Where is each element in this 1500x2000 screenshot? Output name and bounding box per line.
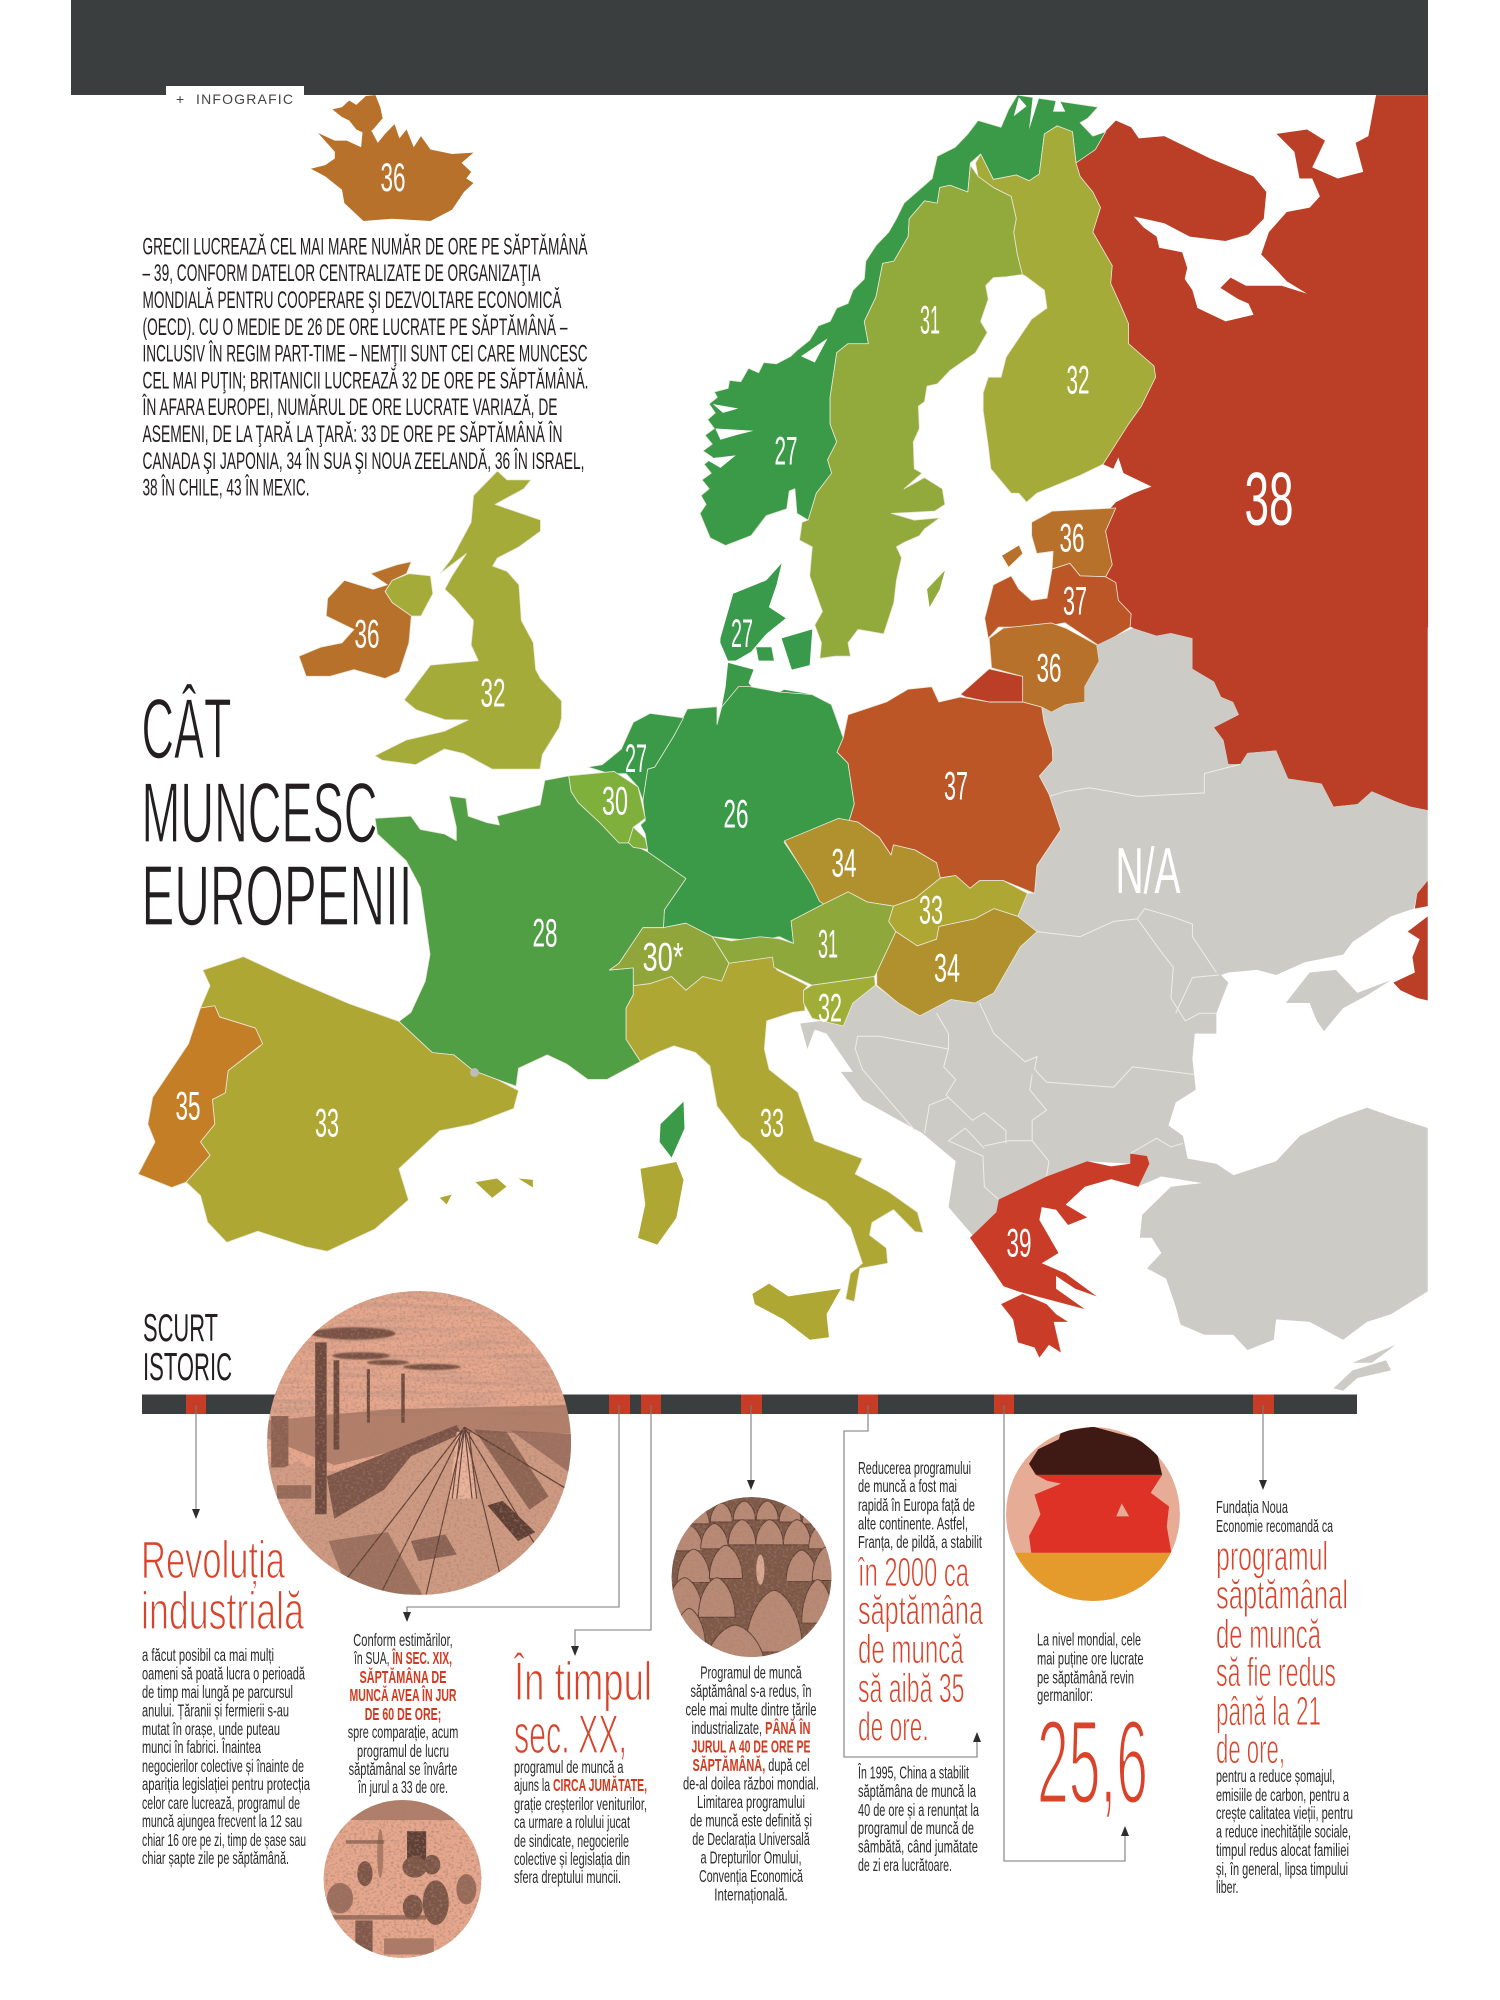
text: în timpul body: ajuns la CIRCA JUMĂTATE,	[514, 1774, 647, 1795]
callout: în 2000 35 de ore	[857, 1549, 983, 1750]
intro text: 38 ÎN CHILE, 43 ÎN MEXIC.	[142, 474, 310, 502]
text: fundația body: a reduce inechitățile sociale,	[1216, 1822, 1351, 1842]
text: programul de muncă redus	[683, 1662, 819, 1904]
country: Estonia	[1002, 508, 1116, 577]
label: Lithuania: 36	[1036, 646, 1062, 690]
timeline bar	[142, 1394, 1357, 1414]
text: revoluția body: de timp mai lungă pe parcursul	[142, 1682, 293, 1702]
text: programul de muncă redus: cele mai multe dintre țările	[686, 1700, 816, 1720]
country: Norway	[700, 95, 1106, 546]
text: în timpul body: programul de muncă a	[514, 1757, 624, 1777]
country: Denmark	[720, 563, 812, 670]
text: programul de muncă redus: JURUL A 40 DE ORE PE	[692, 1736, 810, 1756]
text: în timpul body	[514, 1757, 647, 1887]
intro text	[142, 234, 588, 502]
label: Hungary: 34	[934, 946, 960, 990]
country: Sweden: 31	[920, 298, 940, 342]
country: France	[375, 776, 686, 1158]
arrows and connectors	[192, 1405, 1267, 1861]
callout: în 2000 35 de ore: în 2000 ca	[857, 1549, 969, 1595]
callout: în 2000 35 de ore: să aibă 35	[858, 1665, 964, 1711]
text: conform estimărilor: în SUA, ÎN SEC. XIX,	[353, 1647, 452, 1668]
country: Switzerland	[609, 923, 729, 990]
country: Italy	[626, 957, 923, 1340]
country: Sweden	[799, 165, 1022, 658]
country: Spain	[186, 957, 533, 1251]
label: Ireland: 36	[354, 612, 380, 656]
label: Latvia: 37	[1063, 580, 1087, 624]
block: germany stat	[1037, 1630, 1148, 1829]
region: Kaliningrad	[960, 669, 1023, 702]
label: Czech Republic: 34	[832, 842, 856, 886]
text: programul de muncă redus: Internațională.	[714, 1884, 788, 1904]
text: fundația body: timpul redus alocat familiei	[1216, 1840, 1349, 1860]
text: revoluția body: oameni să poată lucra o perioadă	[142, 1664, 305, 1684]
intro text: MONDIALĂ PENTRU COOPERARE ŞI DEZVOLTARE ECONOMICĂ	[142, 287, 562, 314]
text: china 1995: sâmbătă, când jumătate	[858, 1836, 978, 1856]
callout: 21 de ore: săptămânal	[1216, 1572, 1348, 1618]
intro text: CEL MAI PUŢIN; BRITANICII LUCREAZĂ 32 DE ORE PE SĂPTĂMÂNĂ.	[142, 367, 588, 394]
text: în timpul body: sfera dreptului muncii.	[514, 1867, 621, 1887]
country: Czech Republic	[784, 818, 940, 906]
label: Slovakia: 33	[919, 888, 943, 932]
heading: revoluția industrială	[141, 1531, 304, 1641]
text: revoluția body: chiar șapte zile pe săptămână.	[142, 1848, 289, 1868]
photo: rows of workers	[672, 1497, 832, 1657]
text: conform estimărilor: săptămânal se învârte	[349, 1759, 457, 1779]
text: la nivel mondial: mai puține ore lucrate	[1037, 1649, 1144, 1669]
text: fundația intro: Fundația Noua	[1216, 1497, 1288, 1517]
intro text: (OECD). CU O MEDIE DE 26 DE ORE LUCRATE PE SĂPTĂMÂNĂ –	[142, 314, 568, 341]
country: Denmark: 27	[731, 612, 753, 656]
country: Iceland	[311, 95, 474, 221]
text: fundația body: pentru a reduce șomajul,	[1216, 1766, 1335, 1786]
text: revoluția body: celor care lucrează, programul de	[142, 1793, 300, 1813]
text: fundația body: emisiile de carbon, pentru a	[1216, 1785, 1349, 1805]
text: revoluția body: chiar 16 ore pe zi, timp de șase sau	[142, 1830, 306, 1850]
text: programul de muncă redus: a Drepturilor Omului,	[700, 1848, 802, 1868]
text: la nivel mondial: germanilor:	[1037, 1685, 1093, 1705]
country: Ireland	[299, 562, 411, 679]
text: china 1995: 40 de ore și a renunțat la	[858, 1800, 979, 1820]
text: fundația intro: Economie recomandă ca	[1216, 1516, 1333, 1536]
title: EUROPENII	[142, 849, 412, 944]
text: revoluția body: negocierilor colective și înainte de	[142, 1756, 304, 1776]
text: china 1995: săptămâna de muncă la	[858, 1781, 976, 1801]
heading: scurt istoric	[143, 1307, 232, 1389]
title: MUNCESC	[142, 766, 378, 861]
text: revoluția body: anului. Țăranii și fermierii s-au	[142, 1700, 289, 1720]
text: china 1995: În 1995, China a stabilit	[857, 1763, 969, 1783]
icon: germany flag map circle	[1006, 1427, 1181, 1601]
text: 25,6	[1037, 1696, 1148, 1829]
text: programul de muncă redus: de-al doilea război mondial.	[683, 1774, 819, 1794]
photo: workshop	[323, 1800, 482, 1959]
label: Belgium: 30	[602, 780, 628, 824]
intro text: – 39, CONFORM DATELOR CENTRALIZATE DE ORGANIZAŢIA	[142, 260, 541, 287]
country: Netherlands: 27	[625, 737, 647, 781]
text: revoluția body: muncă ajungea frecvent la 12 sau	[142, 1811, 302, 1831]
block: revoluția industrială	[141, 1531, 310, 1868]
country: United Kingdom	[375, 471, 562, 769]
text: reducerea intro: Reducerea programului	[858, 1458, 971, 1478]
country: Lithuania	[989, 623, 1099, 712]
intro text: CANADA ŞI JAPONIA, 34 ÎN SUA ŞI NOUA ZEELANDĂ, 36 ÎN ISRAEL,	[142, 448, 584, 475]
label: N/A: N/A	[1116, 834, 1181, 907]
text: reducerea intro: de muncă a fost mai	[858, 1476, 957, 1496]
text: revoluția body	[142, 1645, 310, 1868]
header bar	[71, 0, 1428, 95]
text: conform estimărilor: Conform estimărilor,	[353, 1630, 453, 1650]
text: fundația body: liber.	[1216, 1877, 1238, 1897]
text: conform estimărilor	[348, 1630, 458, 1797]
intro text: INCLUSIV ÎN REGIM PART-TIME – NEMŢII SUNT CEI CARE MUNCESC	[142, 341, 588, 368]
heading: în timpul sec. XX	[513, 1650, 652, 1765]
callout: 21 de ore: până la 21	[1216, 1688, 1321, 1734]
text: revoluția body: munci în fabrici. Înaintea	[142, 1737, 261, 1757]
text: în timpul body: de sindicate, negocierile	[514, 1831, 629, 1851]
label: Norway: 27	[774, 430, 798, 474]
text: conform estimărilor: în jurul a 33 de ore.	[357, 1777, 448, 1797]
country: Russia	[1076, 95, 1428, 1001]
text: revoluția body: mutat în orașe, unde puteau	[142, 1719, 280, 1739]
country: Portugal	[138, 1006, 263, 1187]
text: la nivel mondial: La nivel mondial, cele	[1037, 1630, 1141, 1650]
text: în timpul body: ca urmare a rolului jucat	[514, 1812, 630, 1832]
intro text: GRECII LUCREAZĂ CEL MAI MARE NUMĂR DE ORE PE SĂPTĂMÂNĂ	[142, 234, 588, 260]
text: revoluția body: a făcut posibil ca mai mulți	[142, 1645, 274, 1665]
photo: industrial factory engraving	[267, 1291, 572, 1595]
label: Germany: 26	[724, 792, 748, 836]
country: Germany	[640, 663, 854, 943]
text: în timpul body: colective și legislația din	[514, 1849, 630, 1869]
country: Austria	[712, 892, 896, 985]
text: programul de muncă redus: SĂPTĂMÂNĂ, după cel	[692, 1754, 810, 1775]
label: Italy: 33	[760, 1102, 784, 1146]
callout: 21 de ore: să fie redus	[1216, 1649, 1336, 1695]
callout: 21 de ore: de muncă	[1216, 1611, 1321, 1657]
text: conform estimărilor: programul de lucru	[357, 1741, 449, 1761]
tab: infografic	[166, 86, 304, 110]
text: conform estimărilor: DE 60 DE ORE;	[365, 1704, 441, 1724]
text: programul de muncă redus: de Declarația Universală	[692, 1829, 810, 1849]
label: Russia: 38	[1244, 457, 1294, 541]
text: china 1995: de zi era lucrătoare.	[858, 1855, 952, 1875]
text: programul de muncă redus: de muncă este definită și	[690, 1810, 812, 1830]
map of Europe	[138, 95, 1428, 1391]
text: în timpul body: grație creșterilor veniturilor,	[514, 1794, 647, 1814]
text: fundația intro	[1216, 1497, 1333, 1536]
label: Spain: 33	[315, 1102, 339, 1146]
callout: 21 de ore: programul	[1216, 1533, 1328, 1579]
country: Finland	[976, 126, 1156, 502]
country: Belgium	[569, 771, 648, 850]
label: Iceland: 36	[380, 156, 406, 200]
label: United Kingdom: 32	[480, 672, 506, 716]
text: programul de muncă redus: Limitarea programului	[697, 1792, 805, 1812]
text: conform estimărilor: spre comparație, acum	[348, 1722, 458, 1742]
text: china 1995	[857, 1763, 979, 1875]
country: Slovenia	[804, 977, 875, 1030]
label: France: 28	[532, 912, 558, 956]
text: conform estimărilor: SĂPTĂMÂNA DE	[360, 1666, 446, 1687]
tab: infografic: INFOGRAFIC	[196, 91, 293, 107]
text: programul de muncă redus: industrializate, PÂNĂ ÎN	[692, 1717, 810, 1738]
heading: în timpul sec. XX: În timpul	[513, 1650, 652, 1712]
text: programul de muncă redus: Convenția Economică	[699, 1866, 803, 1886]
text: la nivel mondial: pe săptămână revin	[1037, 1668, 1134, 1688]
callout: 21 de ore	[1216, 1533, 1348, 1772]
text: fundația body: crește calitatea vieții, pentru	[1216, 1803, 1353, 1823]
text: revoluția body: apariția legislației pentru protecția	[142, 1774, 310, 1794]
block: fundația noua economie	[1216, 1497, 1353, 1897]
label: Portugal: 35	[176, 1084, 200, 1128]
label: Switzerland: 30*	[642, 936, 684, 980]
country: Slovakia	[889, 876, 1027, 946]
label: Estonia: 36	[1060, 516, 1084, 560]
label: Slovenia: 32	[818, 986, 842, 1030]
text: reducerea intro: Franța, de pildă, a stabilit	[858, 1532, 982, 1552]
text: reducerea intro	[858, 1458, 982, 1552]
block: în timpul sec. XX	[513, 1650, 652, 1887]
text: fundația body: și, în general, lipsa timpului	[1216, 1859, 1348, 1879]
title: CÂT	[142, 682, 232, 777]
country: Netherlands	[588, 713, 684, 800]
heading: în timpul sec. XX: sec. XX,	[514, 1703, 627, 1765]
text: reducerea intro: rapidă în Europa față de	[858, 1495, 975, 1515]
label: Poland: 37	[944, 764, 968, 808]
text: programul de muncă redus: săptămânal s-a redus, în	[690, 1681, 812, 1701]
text: fundația body	[1216, 1766, 1353, 1897]
callout: 21 de ore: de ore,	[1216, 1726, 1285, 1772]
text: programul de muncă redus: Programul de muncă	[700, 1662, 802, 1682]
callout: în 2000 35 de ore: de ore.	[858, 1704, 929, 1750]
label: Finland: 32	[1066, 358, 1090, 402]
country: Austria: 31	[818, 922, 838, 966]
country: Latvia	[985, 563, 1131, 645]
region: no data, Eastern Europe	[470, 628, 1428, 1391]
heading: scurt istoric: SCURT	[143, 1307, 218, 1350]
heading: scurt istoric: ISTORIC	[143, 1346, 232, 1389]
block: reducerea programului	[857, 1458, 983, 1875]
text: la nivel mondial	[1037, 1630, 1144, 1705]
title	[142, 682, 412, 944]
callout: în 2000 35 de ore: de muncă	[858, 1626, 964, 1672]
callout: în 2000 35 de ore: săptămâna	[858, 1587, 983, 1633]
intro text: ÎN AFARA EUROPEI, NUMĂRUL DE ORE LUCRATE VARIAZĂ, DE	[142, 394, 558, 421]
heading: revoluția industrială: industrială	[141, 1582, 304, 1641]
text: conform estimărilor: MUNCĂ AVEA ÎN JUR	[350, 1684, 457, 1705]
label: Greece: 39	[1006, 1222, 1032, 1266]
intro text: ASEMENI, DE LA ŢARĂ LA ŢARĂ: 33 DE ORE PE SĂPTĂMÂNĂ ÎN	[142, 421, 562, 448]
country: Greece	[970, 1154, 1149, 1358]
country: Poland	[837, 687, 1061, 893]
heading: revoluția industrială: Revoluția	[141, 1531, 285, 1590]
text: china 1995: programul de muncă de	[858, 1818, 974, 1838]
text: reducerea intro: alte continente. Astfel,	[858, 1514, 968, 1534]
country: Hungary	[877, 909, 1037, 1016]
tab: infografic: +	[176, 91, 184, 107]
